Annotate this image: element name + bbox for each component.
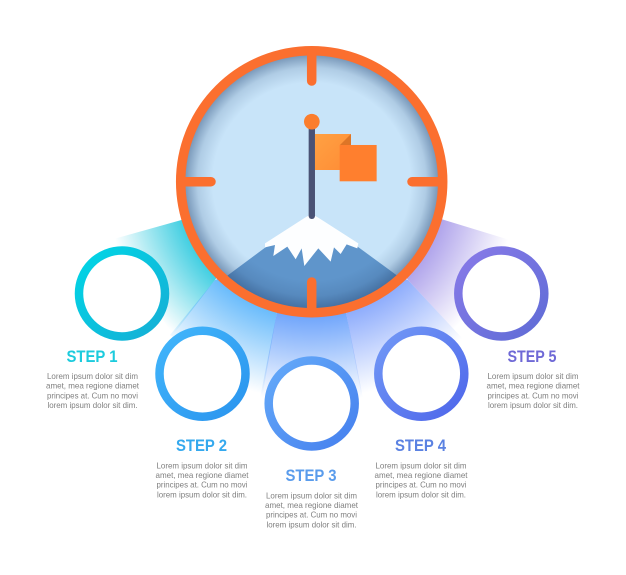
clock face: [185, 55, 439, 309]
step 2 body: [156, 460, 249, 499]
step 1 body: [46, 371, 140, 410]
step 1 body: principes at. Cum no movi: [47, 390, 138, 400]
step 4 body: [374, 460, 468, 499]
beam: step 2: [170, 250, 290, 398]
step 3 text: [265, 467, 359, 529]
step 2 body: principes at. Cum no movi: [156, 480, 248, 490]
step 2 text: [156, 437, 249, 499]
mountain: [228, 216, 396, 308]
step 3 body: [265, 490, 359, 529]
step 4 body: Lorem ipsum dolor sit dim: [376, 460, 467, 470]
step 3 body: principes at. Cum no movi: [266, 510, 357, 520]
step 1 body: lorem ipsum dolor sit dim.: [48, 400, 138, 410]
step 5 text: [486, 348, 580, 410]
step 5 body: principes at. Cum no movi: [488, 390, 579, 400]
step 2 ring: [160, 331, 246, 417]
step 4 body: principes at. Cum no movi: [376, 480, 467, 490]
step 1 text: [46, 348, 140, 410]
clock inner shading: [185, 55, 439, 309]
step 5 body: amet, mea regione diamet: [486, 381, 580, 391]
flag front panel: [340, 145, 377, 181]
beam: step 3: [260, 250, 363, 398]
beam: step 5: [365, 219, 510, 338]
beam: step 4: [335, 250, 462, 398]
step 4 text: [374, 437, 468, 499]
step 3 heading: STEP 3: [286, 467, 336, 485]
step 1 body: Lorem ipsum dolor sit dim: [47, 371, 138, 381]
step 5 ring: [458, 250, 544, 336]
step 2 body: amet, mea regione diamet: [156, 470, 249, 480]
step 1 ring: [79, 250, 165, 336]
flag pole: [309, 125, 315, 219]
step 3 body: lorem ipsum dolor sit dim.: [266, 519, 356, 529]
step 1 body: amet, mea regione diamet: [46, 381, 140, 391]
clock tick marks: [182, 52, 441, 311]
flag fold: [340, 134, 351, 145]
step 2 body: Lorem ipsum dolor sit dim: [156, 460, 248, 470]
step 4 body: lorem ipsum dolor sit dim.: [376, 489, 466, 499]
step 3 body: Lorem ipsum dolor sit dim: [266, 490, 357, 500]
step 2 heading: STEP 2: [176, 437, 227, 455]
step 5 body: [486, 371, 580, 410]
clock with mountain and flag: [181, 51, 443, 330]
flag: [304, 114, 377, 219]
beam: step 1: [110, 219, 260, 335]
step 4 ring: [378, 331, 464, 417]
step 5 body: Lorem ipsum dolor sit dim: [488, 371, 579, 381]
pole ball: [304, 114, 320, 129]
step 5 body: lorem ipsum dolor sit dim.: [488, 400, 578, 410]
flag back panel: [315, 134, 351, 170]
clock orange ring: [181, 51, 443, 313]
mountain snow cap: [265, 213, 358, 266]
step 3 body: amet, mea regione diamet: [265, 500, 359, 510]
step 4 heading: STEP 4: [395, 437, 447, 455]
step 5 heading: STEP 5: [508, 348, 556, 366]
step 2 body: lorem ipsum dolor sit dim.: [157, 489, 247, 499]
step 3 ring: [269, 360, 355, 446]
step 4 body: amet, mea regione diamet: [374, 470, 468, 480]
step 1 heading: STEP 1: [66, 348, 118, 366]
